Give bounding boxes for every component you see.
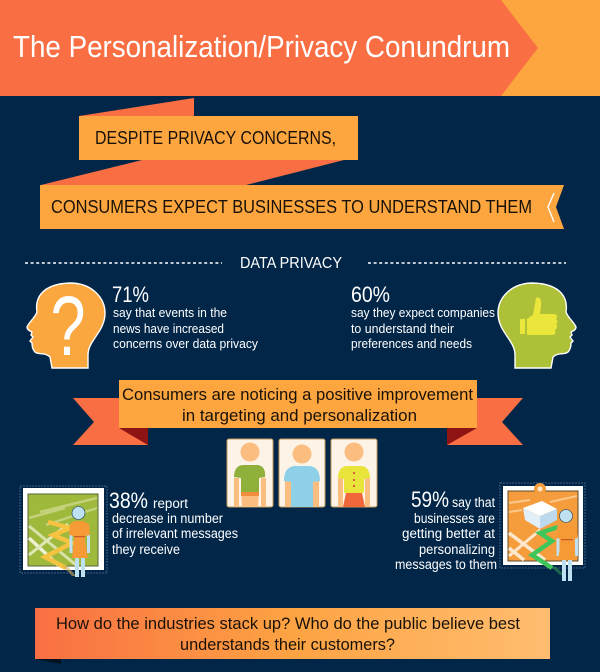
icon: woman figure [69, 506, 90, 577]
icon: person card with green top [227, 439, 273, 507]
bottom banner: industries question: understands their customers? [180, 635, 395, 654]
stat: 59 percent: messages to them [395, 557, 497, 572]
icon: thumb [520, 297, 558, 335]
ribbon: despite privacy concerns [79, 116, 358, 160]
icon: head with question mark: ? [50, 279, 86, 373]
icon: woman figure [556, 510, 578, 581]
stat: 38 percent: they receive [112, 542, 180, 557]
section heading: data privacy: DATA PRIVACY [240, 255, 342, 272]
stat: 60 percent: preferences and needs [351, 336, 472, 351]
ribbon: consumers expect: CONSUMERS EXPECT BUSINESSES TO UNDERSTAND THEM [51, 197, 532, 217]
ribbon headline [40, 98, 564, 229]
stat: 71 percent: 71% [112, 282, 149, 307]
stat: 60 percent: say they expect companies [351, 305, 495, 320]
stat: 38 percent: decrease in number [112, 511, 223, 526]
icon: white box [523, 501, 557, 529]
title: The Personalization/Privacy Conundrum [13, 29, 510, 64]
ribbon: despite privacy concerns: DESPITE PRIVACY CONCERNS, [95, 128, 336, 148]
icon: head with thumbs up [498, 283, 576, 368]
stat: 71 percent: concerns over data privacy [113, 336, 258, 351]
stat: 38 percent [109, 488, 238, 557]
icon: location pin [534, 483, 546, 499]
stat: 59 percent: 59% [411, 487, 449, 512]
bottom banner: industries question [35, 608, 550, 664]
icon: person card with yellow top [331, 439, 377, 507]
banner: positive improvement: in targeting and personalization [182, 406, 417, 425]
icon: head with question mark [27, 279, 105, 373]
header banner [0, 0, 600, 96]
stat: 60 percent: 60% [351, 282, 390, 307]
icon: person card with blue top [279, 439, 325, 507]
stat: 59 percent: getting better at [402, 526, 495, 541]
stat: 60 percent [351, 282, 495, 351]
stat: 38 percent: of irrelevant messages [112, 526, 238, 541]
ribbon: consumers expect [40, 185, 564, 229]
stat: 59 percent: say that [452, 495, 495, 510]
stat: 71 percent: say that events in the [113, 305, 227, 320]
banner: positive improvement [73, 380, 523, 445]
stat: 71 percent [112, 282, 258, 351]
banner: positive improvement: Consumers are noticing a positive improvement [122, 385, 473, 404]
stat: 59 percent: businesses are [414, 511, 495, 526]
stat: 38 percent: 38% [109, 488, 148, 513]
bottom banner: industries question: How do the industries stack up? Who do the public believe best [56, 614, 520, 633]
stat: 60 percent: to understand their [351, 321, 455, 336]
icon: map with woman, green [20, 486, 107, 577]
stat: 38 percent: report [153, 496, 188, 511]
stat: 59 percent [395, 487, 497, 572]
icon: map with woman, orange [500, 483, 585, 581]
stat: 59 percent: personalizing [419, 542, 495, 557]
stat: 71 percent: news have increased [113, 321, 224, 336]
